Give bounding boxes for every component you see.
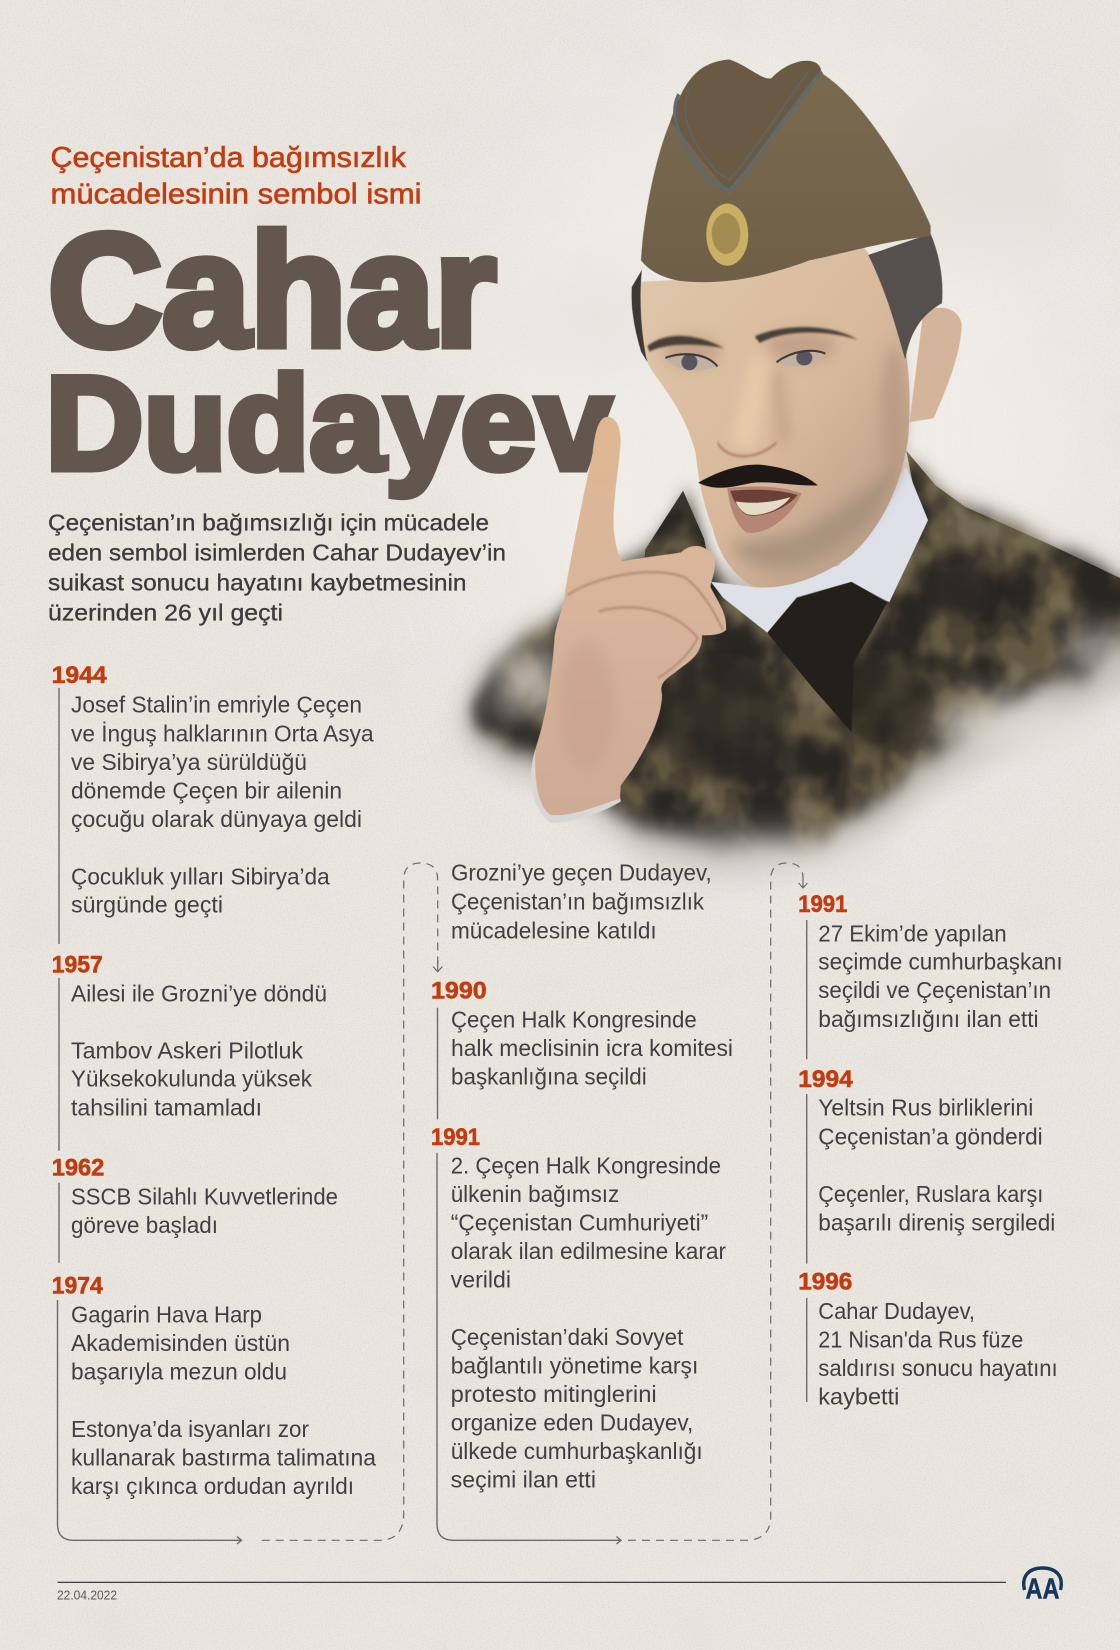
timeline column 3: [798, 891, 1063, 1410]
entry 1996: 1996: [798, 1269, 852, 1296]
entry 1944: çocuğu olarak dünyaya geldi: [71, 806, 362, 832]
intro paragraph: [48, 509, 506, 626]
entry 1996: Cahar Dudayev,: [818, 1298, 975, 1324]
entry 1974: karşı çıkınca ordudan ayrıldı: [71, 1473, 354, 1499]
entry 1994: 1994: [798, 1066, 853, 1093]
entry 1996: 21 Nisan'da Rus füze: [818, 1326, 1023, 1352]
entry 1974: Akademisinden üstün: [71, 1330, 290, 1356]
timeline connector, column 2: [437, 863, 807, 1544]
ear: [910, 308, 962, 422]
entry 1990: 1990: [431, 977, 487, 1004]
entry 1991: 2. Çeçen Halk Kongresinde: [451, 1152, 721, 1178]
title: name: Cahar: [48, 200, 496, 380]
entry 1991: 27 Ekim’de yapılan: [818, 920, 1007, 946]
entry 1994: Yeltsin Rus birliklerini: [818, 1095, 1033, 1121]
subtitle: Çeçenistan’da bağımsızlık: [50, 142, 407, 174]
entry 1974: Estonya’da isyanları zor: [71, 1416, 309, 1442]
entry 1991: verildi: [451, 1267, 511, 1293]
entry 1962: 1962: [52, 1155, 104, 1182]
intro paragraph: suikast sonucu hayatını kaybetmesinin: [48, 569, 466, 595]
jacket: [460, 451, 1120, 866]
entry 1991: bağımsızlığını ilan etti: [818, 1006, 1039, 1032]
entry 1996: kaybetti: [818, 1384, 899, 1410]
entry 1994: Çeçenler, Ruslara karşı: [818, 1181, 1043, 1207]
entry 1996: [798, 1269, 1058, 1410]
entry 1944: dönemde Çeçen bir ailenin: [71, 777, 342, 803]
entry 1996: saldırısı sonucu hayatını: [818, 1355, 1058, 1381]
entry 1974: kullanarak bastırma talimatına: [71, 1444, 376, 1470]
entry 1994: başarılı direniş sergiledi: [818, 1209, 1055, 1235]
entry 1974: başarıyla mezun oldu: [71, 1359, 287, 1385]
entry 1944: [52, 662, 374, 918]
shirt collar: [711, 467, 928, 633]
subtitle: [50, 142, 422, 211]
mist around jacket: [494, 630, 1120, 866]
entry 1991: [431, 1124, 726, 1493]
entry 1944: Josef Stalin’in emriyle Çeçen: [71, 692, 362, 718]
intro paragraph: üzerinden 26 yıl geçti: [48, 600, 283, 626]
entry 1990: halk meclisinin icra komitesi: [451, 1035, 733, 1061]
face: [638, 244, 910, 587]
entry 1957: [52, 952, 327, 1121]
entry 1974: 1974: [52, 1273, 103, 1300]
entry 1957: tahsilini tamamladı: [71, 1095, 262, 1121]
entry: joins independence struggle: Çeçenistan’ın bağımsızlık: [451, 888, 704, 914]
entry 1962: [52, 1155, 338, 1238]
entry 1994: Çeçenistan’a gönderdi: [818, 1123, 1043, 1149]
hand with raised finger: [531, 417, 726, 823]
garrison cap: [641, 59, 931, 282]
entry 1990: [431, 977, 733, 1090]
subtitle: mücadelesinin sembol ismi: [50, 179, 422, 211]
entry 1991: seçimi ilan etti: [451, 1467, 596, 1493]
entry 1991: 1991: [798, 891, 847, 918]
entry 1991: seçildi ve Çeçenistan’ın: [818, 977, 1051, 1003]
entry 1991: ülkenin bağımsız: [451, 1181, 619, 1207]
entry 1991: 1991: [431, 1124, 480, 1151]
entry 1944: ve Sibirya’ya sürüldüğü: [71, 749, 307, 775]
timeline column 1: [52, 662, 442, 1544]
hair: [632, 234, 942, 362]
entry 1991: olarak ilan edilmesine karar: [451, 1238, 726, 1264]
entry 1991: bağlantılı yönetime karşı: [451, 1352, 698, 1378]
entry 1974: Gagarin Hava Harp: [71, 1302, 262, 1328]
intro paragraph: eden sembol isimlerden Cahar Dudayev’in: [48, 540, 506, 566]
entry 1944: 1944: [52, 662, 107, 689]
entry 1944: ve İnguş halklarının Orta Asya: [71, 720, 374, 746]
entry 1957: Ailesi ile Grozni’ye döndü: [71, 981, 327, 1007]
eyebrows: [647, 327, 858, 351]
timeline rules, column 3: [806, 920, 808, 1402]
entry 1957: 1957: [52, 952, 103, 979]
entry 1990: Çeçen Halk Kongresinde: [451, 1006, 697, 1032]
cap badge: [706, 204, 748, 266]
entry 1962: göreve başladı: [71, 1212, 218, 1238]
entry 1991: protesto mitinglerini: [451, 1381, 657, 1407]
entry 1991: seçimde cumhurbaşkanı: [818, 949, 1063, 975]
entry 1991: [798, 891, 1063, 1032]
title: name: Dudayev: [46, 350, 612, 498]
eyes: [665, 350, 825, 371]
sweater: [767, 582, 887, 732]
entry: joins independence struggle: mücadelesine katıldı: [451, 917, 657, 943]
entry 1957: Tambov Askeri Pilotluk: [71, 1038, 304, 1064]
entry 1991: ülkede cumhurbaşkanlığı: [451, 1438, 703, 1464]
entry 1991: Çeçenistan’daki Sovyet: [451, 1324, 684, 1350]
intro paragraph: Çeçenistan’ın bağımsızlığı için mücadele: [48, 509, 489, 535]
title: name: [46, 200, 612, 498]
entry: joins independence struggle: Grozni’ye geçen Dudayev,: [451, 860, 712, 886]
entry 1991: organize eden Dudayev,: [451, 1410, 693, 1436]
entry 1957: Yüksekokulunda yüksek: [71, 1066, 312, 1092]
entry: joins independence struggle: [451, 860, 712, 943]
icon: AA logo: AA: [1026, 1574, 1060, 1606]
timeline connector, column 1: [58, 688, 442, 1544]
mouth: [727, 486, 802, 533]
entry 1991: “Çeçenistan Cumhuriyeti”: [451, 1210, 708, 1236]
entry 1944: Çocukluk yılları Sibirya’da: [71, 863, 330, 889]
entry 1944: sürgünde geçti: [71, 892, 223, 918]
facial shading: [662, 331, 906, 569]
footer rule and date: 22.04.2022: [57, 1588, 117, 1602]
entry 1962: SSCB Silahlı Kuvvetlerinde: [71, 1184, 338, 1210]
entry 1994: [798, 1066, 1055, 1235]
portrait of Dudayev: [460, 59, 1120, 866]
timeline column 2: [431, 860, 807, 1544]
entry 1974: [52, 1273, 376, 1499]
entry 1990: başkanlığına seçildi: [451, 1064, 647, 1090]
moustache: [698, 465, 818, 488]
